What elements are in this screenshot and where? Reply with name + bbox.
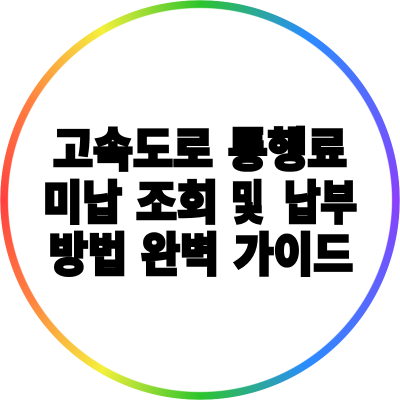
title line 2: 납부 xyxy=(284,177,357,229)
title line 3: 가이드 xyxy=(234,229,353,281)
title line 2: 조회 xyxy=(136,177,218,229)
title line 1 xyxy=(53,124,347,176)
title line 3: 완벽 xyxy=(141,229,219,281)
title line 2 xyxy=(43,177,357,229)
title line 2: 미납 xyxy=(43,177,122,229)
title line 3 xyxy=(49,229,353,281)
title line 1: 통행료 xyxy=(228,124,347,176)
title line 1: 고속도로 xyxy=(53,124,213,176)
title line 3: 방법 xyxy=(49,229,127,281)
title line 2: 및 xyxy=(231,177,264,229)
